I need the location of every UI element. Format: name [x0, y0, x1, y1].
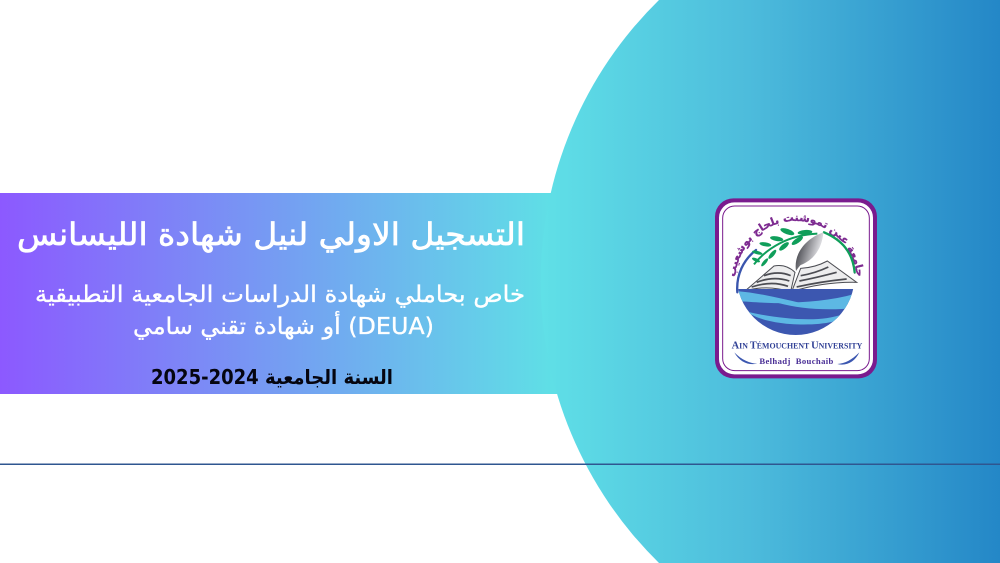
green and blue arcs: [737, 232, 855, 292]
founder name: Belhadj Bouchaib: [759, 356, 834, 366]
horizontal divider line: [0, 464, 1000, 465]
logo frame: [715, 198, 877, 378]
subtitle block: خاص بحاملي شهادة الدراسات الجامعية التطبيقية: [35, 282, 525, 308]
open book: [745, 261, 857, 292]
heading: التسجيل الاولي لنيل شهادة الليسانس: [17, 217, 525, 253]
laurel branch: [751, 227, 817, 267]
subtitle block: [35, 282, 525, 340]
water: [738, 289, 854, 335]
banner band: [0, 193, 560, 394]
swooshes: [734, 352, 859, 365]
arc lettering: جامعة عين تموشنت بلحاج بوشعيب: [732, 215, 864, 276]
university name: AIN TÉMOUCHENT UNIVERSITY: [732, 340, 862, 352]
quill: [796, 232, 823, 271]
subtitle block: (DEUA) أو شهادة تقني سامي: [133, 311, 434, 340]
university logo: [714, 198, 877, 378]
academic year: السنة الجامعية 2024-2025: [151, 365, 393, 389]
background circle: [541, 0, 1000, 563]
